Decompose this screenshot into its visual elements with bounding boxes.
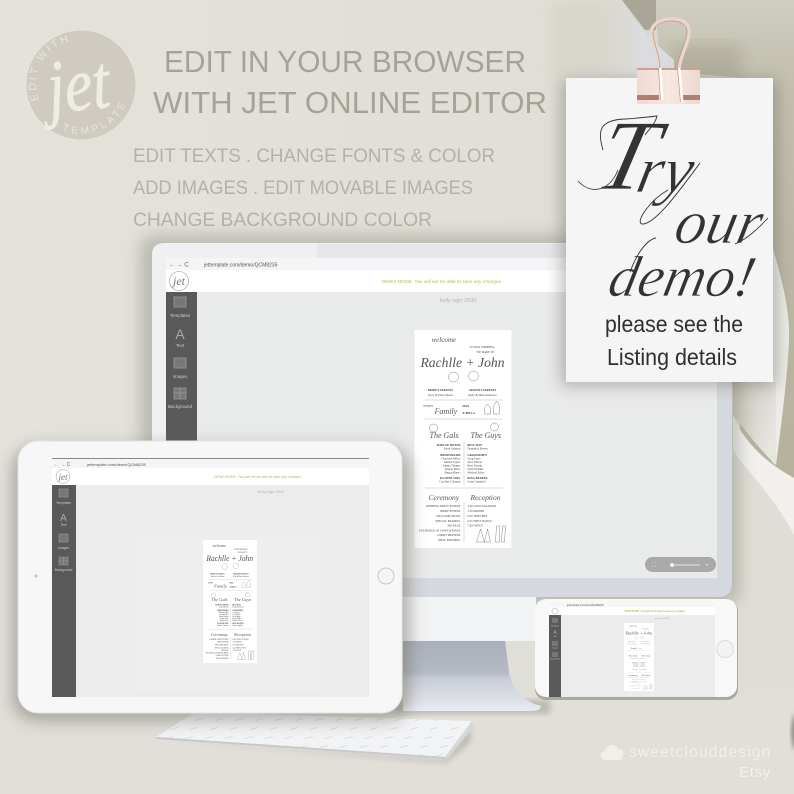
wedding program monitor: GROOMSMEN xyxy=(468,454,487,457)
tablet sidebar: Images xyxy=(58,546,69,550)
wedding program monitor: TO OUR WEDDING xyxy=(470,346,494,349)
phone sidebar: Background xyxy=(550,658,560,660)
fabric drape xyxy=(550,0,794,750)
wedding program phone: 5:30 DINNER xyxy=(640,679,646,681)
wedding program monitor: WE MADE IT! xyxy=(477,351,495,354)
wedding program monitor: BRIDE'S PARENTS xyxy=(428,389,454,392)
wedding program monitor: Brett Martin xyxy=(468,464,483,468)
tablet browser bar: jettemplate.com/demo/QCM8235 xyxy=(86,462,146,467)
wedding program phone xyxy=(624,623,654,691)
editor sidebar: A xyxy=(175,326,185,342)
wedding program tablet: The Guys xyxy=(234,597,251,602)
phone sidebar: Text xyxy=(553,635,557,638)
wedding program tablet: WEDDING PARTY ENTERS xyxy=(209,638,229,641)
wedding program monitor: The Guys xyxy=(470,431,501,440)
wedding program monitor: Angela Davis xyxy=(445,468,460,471)
card caption xyxy=(605,311,743,370)
title xyxy=(153,44,547,120)
logo badge xyxy=(26,30,136,140)
wedding program monitor: & BELLA xyxy=(462,412,475,415)
wedding program phone: EXCHANGE OF VOWS xyxy=(629,684,639,687)
wedding program phone: WEDDING PARTY ENTERS xyxy=(628,676,639,679)
wedding program tablet: David Walker xyxy=(233,618,242,620)
wedding program tablet: 6:30 SPEECHES xyxy=(233,644,244,647)
wedding program monitor: Family xyxy=(434,407,458,416)
wedding program tablet: TO OUR WEDDING xyxy=(234,549,248,551)
wedding program monitor: WELCOME MUSIC xyxy=(436,515,461,518)
script headline: T xyxy=(587,100,676,211)
hanging card shadow xyxy=(561,80,777,386)
icon: cloud xyxy=(601,745,623,760)
tablet canvas panel xyxy=(135,535,321,692)
wedding program tablet: Emma Thomas xyxy=(219,616,229,618)
wedding program monitor: MUSIAGE xyxy=(448,524,461,528)
wedding program monitor: BRIDESMAIDS xyxy=(440,454,461,457)
wedding program phone: David Walker xyxy=(640,666,646,668)
wedding program phone: Brett Martin xyxy=(640,665,645,667)
wedding program monitor: Stacy & Peter Mason xyxy=(428,394,453,397)
wedding program monitor: SPECIAL READING xyxy=(435,520,460,523)
tablet sidebar: Background xyxy=(55,568,72,572)
monitor stand xyxy=(395,640,550,714)
wedding program tablet: & BELLA xyxy=(230,585,238,588)
wedding program phone: Family xyxy=(629,647,638,650)
watermark label: kelly-sign 2030 xyxy=(440,298,477,304)
browser bar: jettemplate.com/demo/QCM8235 xyxy=(203,262,278,268)
wedding program tablet: Angela Davis xyxy=(220,617,229,620)
wedding program phone: GROOM'S PARENTS xyxy=(641,640,650,643)
tablet sidebar: A xyxy=(60,513,67,524)
feature list: CHANGE BACKGROUND COLOR xyxy=(133,210,432,231)
editor sidebar: Text xyxy=(176,343,185,348)
zoom control pill: ⛶ xyxy=(652,562,657,569)
wedding program monitor: 6:45 FIRST DANCE xyxy=(468,520,492,523)
wedding program monitor: Greg Jones xyxy=(468,458,481,460)
shop name: sweetclouddesign xyxy=(629,744,771,761)
wedding program monitor: Sarah Johnson xyxy=(444,448,461,450)
editor sidebar xyxy=(166,292,197,442)
wedding program phone: WE MADE IT! xyxy=(643,628,649,631)
wedding program phone: Ceremony xyxy=(628,674,639,677)
hanging card xyxy=(566,78,773,382)
wedding program tablet xyxy=(203,540,257,663)
wedding program monitor: Caroline Coleman xyxy=(439,480,461,484)
wedding program tablet: MUSIAGE xyxy=(221,649,229,652)
wedding program tablet: MAX xyxy=(230,581,234,584)
wedding program tablet: FUNNY xyxy=(208,582,214,584)
wedding program monitor: WEDDING PARTY ENTERS xyxy=(426,505,461,508)
monitor frame xyxy=(152,243,732,597)
editor header: jet xyxy=(171,274,186,288)
wedding program tablet: BRIDESMAIDS xyxy=(217,609,229,612)
phone home button xyxy=(716,640,734,658)
wedding program phone: FLOWER GIRL xyxy=(632,668,639,670)
title: WITH JET ONLINE EDITOR xyxy=(153,85,547,120)
tablet header: DEMO MODE. You will not be able to save any changes. xyxy=(214,475,302,479)
wedding program phone: & BELLA xyxy=(639,647,643,650)
wedding program tablet: Charlotte Miller xyxy=(218,612,229,614)
wedding program tablet: 7:00 DANCE xyxy=(233,649,241,652)
tablet screen xyxy=(52,458,369,697)
wedding program phone: The Gals xyxy=(629,655,638,658)
wedding program tablet: Ceremony xyxy=(211,632,228,637)
monitor xyxy=(152,243,732,641)
wedding program phone: Angela Davis xyxy=(633,665,639,668)
script headline xyxy=(578,100,770,309)
wedding program phone: MEAL BLESSING xyxy=(631,687,639,690)
table surface xyxy=(0,694,794,794)
tablet camera xyxy=(34,574,38,578)
wedding program tablet: 6:45 FIRST DANCE xyxy=(233,646,246,649)
wedding program tablet: The Gals xyxy=(211,597,228,602)
logo script: jet xyxy=(36,40,115,131)
tablet browser bar xyxy=(52,459,369,468)
wedding program tablet: BRIDE'S PARENTS xyxy=(210,572,225,575)
phone sidebar: Templates xyxy=(551,624,559,628)
wedding program tablet: 4:30 COCKTAIL HOUR xyxy=(233,638,248,641)
wedding program phone: The Guys xyxy=(641,655,651,658)
editor sidebar: Images xyxy=(173,374,188,379)
title: EDIT IN YOUR BROWSER xyxy=(164,44,526,79)
wedding program phone: BEST MAN xyxy=(640,657,645,660)
monitor chin xyxy=(152,597,536,641)
editor header: DEMO MODE. You will not be able to save any changes. xyxy=(382,279,502,285)
tablet sidebar xyxy=(52,485,76,697)
wedding program monitor: 7:00 DANCE xyxy=(468,524,483,528)
rose gold binder clip xyxy=(637,19,700,104)
wedding program phone: Charlotte Miller xyxy=(632,662,639,664)
phone xyxy=(535,599,738,700)
wedding program tablet: Stacy & Peter Mason xyxy=(211,576,225,578)
wedding program tablet: Alex Wilson xyxy=(233,613,241,616)
wedding program tablet: Reception xyxy=(233,632,251,637)
wedding program tablet: EXCHANGE OF VOWS & RINGS xyxy=(206,652,229,655)
brand signature xyxy=(601,744,771,781)
phone watermark label: kelly-sign 2030 xyxy=(655,618,670,620)
wedding program phone: BRIDE'S PARENTS xyxy=(628,640,636,643)
wedding program phone: RING BEARER xyxy=(640,667,647,670)
tablet watermark label: kelly-sign 2030 xyxy=(258,489,285,494)
wedding program phone: BRIDE ENTERS xyxy=(632,679,639,681)
wedding program tablet: Greg Jones xyxy=(233,611,240,614)
tablet sidebar: Templates xyxy=(56,501,71,505)
wedding program monitor: Alex Wilson xyxy=(468,461,483,464)
wedding program tablet: Family xyxy=(213,583,227,588)
wedding program tablet: BRIDE ENTERS xyxy=(217,642,229,644)
wedding program monitor: The Gals xyxy=(430,431,459,440)
wedding program monitor xyxy=(414,330,512,548)
wedding program tablet: Dominick Brown xyxy=(233,606,244,608)
wedding program phone: TO OUR WEDDING xyxy=(641,628,649,630)
wedding program tablet: LORD'S PRAYERS xyxy=(216,654,229,657)
wedding program phone: Rachlle + John xyxy=(625,631,652,636)
wedding program monitor: Rachlle + John xyxy=(420,356,505,371)
phone sidebar xyxy=(549,615,561,697)
wedding program phone: Stacy & Peter Mason xyxy=(628,643,636,645)
zoom control pill: + xyxy=(705,563,709,569)
wedding program monitor: Charlotte Miller xyxy=(442,458,460,460)
wedding program monitor: GROOM'S PARENTS xyxy=(469,389,497,392)
wedding program tablet: Rachlle + John xyxy=(205,554,253,563)
wedding program phone: 6:30 SPEECHES xyxy=(640,680,647,682)
editor sidebar: Templates xyxy=(170,313,191,318)
wedding program tablet: welcome xyxy=(212,544,226,548)
wedding program monitor: Dominick Brown xyxy=(468,448,488,450)
wedding program monitor: 6:30 SPEECHES xyxy=(468,515,488,518)
wedding program monitor: Kelly & Mark Anderson xyxy=(468,394,497,397)
wedding program monitor: 4:30 COCKTAIL HOUR xyxy=(468,505,496,508)
card caption: please see the xyxy=(605,311,743,337)
wedding program monitor: David Walker xyxy=(468,468,484,471)
feature list: EDIT TEXTS . CHANGE FONTS & COLOR xyxy=(133,146,495,167)
wedding program tablet: GROOMSMEN xyxy=(233,610,244,612)
wedding program tablet: 5:30 DINNER xyxy=(233,642,242,644)
wedding program tablet: Kelly & Mark Anderson xyxy=(233,575,249,578)
wedding program phone: WELCOME MUSIC xyxy=(631,680,639,682)
zoom control pill xyxy=(645,557,716,572)
keyboard xyxy=(156,712,473,763)
tablet header xyxy=(52,468,369,485)
wedding program tablet: WE MADE IT! xyxy=(238,551,248,554)
wedding program tablet: MEAL BLESSING xyxy=(216,657,229,660)
wedding program tablet: GROOM'S PARENTS xyxy=(233,572,249,575)
wedding program tablet: MAID OF HONOR xyxy=(215,603,229,606)
wedding program tablet: Brett Martin xyxy=(233,616,241,618)
wedding program phone: Emma Thomas xyxy=(633,665,639,667)
wedding program monitor: MEAL BLESSING xyxy=(438,539,460,542)
wedding program tablet: RING BEARER xyxy=(233,622,244,625)
wedding program tablet: Megan Harris xyxy=(220,619,229,622)
wedding program phone: MAID OF HONOR xyxy=(631,657,639,660)
wedding program phone: Alex Wilson xyxy=(640,662,645,665)
wedding program monitor: Amelia Taylor xyxy=(444,461,461,464)
wedding program phone: BRIDESMAIDS xyxy=(632,660,639,663)
wedding program monitor: 5:30 DINNER xyxy=(468,510,484,513)
phone sidebar: Images xyxy=(552,648,558,650)
browser bar: ← → C xyxy=(169,262,189,268)
phone sidebar: A xyxy=(553,630,557,636)
script headline: demo! xyxy=(603,245,762,309)
tablet header: jet xyxy=(58,472,68,482)
wedding program phone: Kelly & Mark Anderson xyxy=(641,642,650,645)
tablet browser bar: ← → C xyxy=(54,462,71,468)
wedding program tablet: Liam Campbell xyxy=(233,625,243,627)
wedding program monitor: MAX xyxy=(462,405,469,408)
wedding program tablet: FLOWER GIRL xyxy=(217,623,229,625)
wedding program tablet: Michael Allen xyxy=(233,619,242,622)
browser bar xyxy=(166,258,717,270)
wedding program monitor: welcome xyxy=(432,336,456,344)
wedding program monitor: BRIDE ENTERS xyxy=(440,510,461,513)
wedding program monitor: EXCHANGE OF VOWS & RINGS xyxy=(419,530,461,532)
wedding program monitor: Reception xyxy=(470,493,501,502)
phone browser bar xyxy=(549,602,715,607)
wedding program tablet: BEST MAN xyxy=(233,603,242,606)
wedding program monitor: BEST MAN xyxy=(468,444,482,447)
script headline: ry xyxy=(631,135,702,207)
wedding program monitor: MAID OF HONOR xyxy=(437,444,460,447)
wedding program monitor: LORD'S PRAYERS xyxy=(437,534,461,537)
card caption: Listing details xyxy=(607,344,737,370)
shop platform: Etsy xyxy=(739,764,771,781)
monitor screen xyxy=(166,258,717,578)
wedding program phone: SPECIAL READING xyxy=(631,681,639,684)
phone browser bar: jettemplate.com/demo/QCM8235 xyxy=(566,604,604,607)
wedding program monitor: Michael Allen xyxy=(468,472,485,474)
editor sidebar: Background xyxy=(168,404,192,409)
feature list: ADD IMAGES . EDIT MOVABLE IMAGES xyxy=(133,178,473,199)
wedding program phone: GROOMSMEN xyxy=(640,661,647,663)
monitor shadow xyxy=(140,235,740,605)
wedding program monitor: FUNNY xyxy=(424,405,433,408)
tablet xyxy=(18,441,402,713)
phone header: DEMO MODE. You will not be able to save any changes. xyxy=(625,610,686,613)
tablet home button xyxy=(378,568,394,584)
logo curved text bottom: TEMPLATE xyxy=(64,102,126,134)
wedding program tablet: Caroline Coleman xyxy=(217,625,229,627)
wedding program monitor: Emma Thomas xyxy=(443,464,460,468)
wedding program phone: Amelia Taylor xyxy=(633,662,639,665)
wedding program phone: Reception xyxy=(640,674,651,677)
wedding program phone: Greg Jones xyxy=(640,661,645,664)
phone screen xyxy=(549,602,715,697)
tablet sidebar: Text xyxy=(60,523,67,527)
wedding program phone: 4:30 COCKTAIL HOUR xyxy=(640,676,650,679)
wedding program tablet: SPECIAL READING xyxy=(215,646,229,649)
tablet shadow xyxy=(12,446,410,721)
wedding program phone: welcome xyxy=(629,626,637,628)
wedding program tablet: Amelia Taylor xyxy=(219,613,229,616)
phone header xyxy=(549,607,715,615)
editor header xyxy=(166,270,717,292)
wedding program monitor: Ceremony xyxy=(428,493,460,502)
logo curved text top: EDIT WITH xyxy=(28,35,68,101)
wedding program monitor: Megan Harris xyxy=(444,472,460,474)
script headline: our xyxy=(669,188,770,257)
wedding program tablet: Sarah Johnson xyxy=(219,606,229,608)
wedding program monitor: FLOWER GIRL xyxy=(440,477,461,480)
feature list xyxy=(133,146,495,231)
wedding program monitor: Liam Campbell xyxy=(468,480,486,484)
wedding program tablet: WELCOME MUSIC xyxy=(215,644,229,647)
wedding program monitor: RING BEARER xyxy=(468,477,488,480)
